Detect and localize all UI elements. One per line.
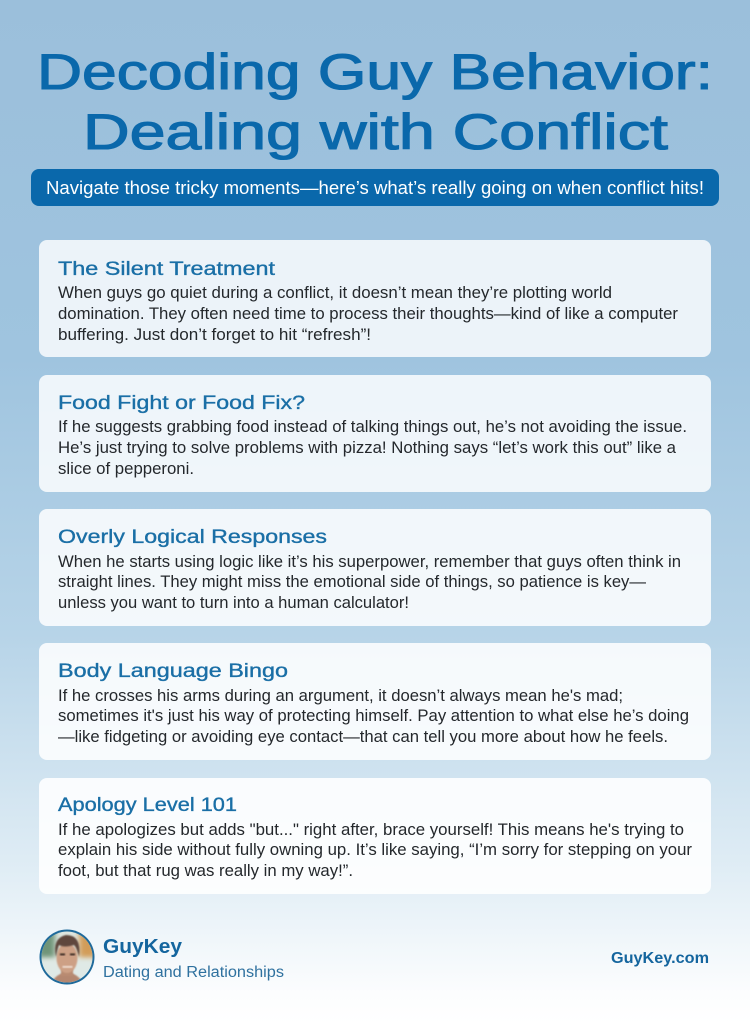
panel: The Silent Treatment [39,240,711,357]
icon: author avatar [38,930,96,986]
panel: Overly Logical Responses: When he starts using logic like it’s his superpower, remember that guys often think in [58,553,681,571]
panel: Body Language Bingo [39,643,711,760]
panel: Apology Level 101: Apology Level 101 [58,795,237,816]
subtitle banner [31,169,719,206]
panel: Body Language Bingo: sometimes it's just his way of protecting himself. Pay attention to what else he’s doing [58,707,689,725]
panel: Overly Logical Responses: unless you want to turn into a human calculator! [58,594,409,612]
panel: Apology Level 101: foot, but that rug was really in my way!”. [58,862,353,880]
panel: The Silent Treatment: buffering. Just don’t forget to hit “refresh”! [58,326,371,344]
panel: Overly Logical Responses: straight lines. They might miss the emotional side of things, so patience is key— [58,573,647,591]
panel: The Silent Treatment: When guys go quiet during a conflict, it doesn’t mean they’re plotting world [58,284,612,302]
panel: Apology Level 101: explain his side without fully owning up. It’s like saying, “I’m sorry for stepping on your [58,841,693,859]
panel: Apology Level 101: If he apologizes but adds "but..." right after, brace yourself! This means he's trying to [58,821,684,839]
panel: Body Language Bingo: If he crosses his arms during an argument, it doesn’t always mean he's mad; [58,687,623,705]
title: Dealing with Conflict [83,104,668,160]
panel: Body Language Bingo: Body Language Bingo [58,661,288,682]
panel: Food Fight or Food Fix?: If he suggests grabbing food instead of talking things out, he’s not avoiding the issue. [58,418,687,436]
panel: Apology Level 101 [39,778,711,894]
title: Decoding Guy Behavior: [37,44,713,100]
panel: Body Language Bingo: —like fidgeting or avoiding eye contact—that can tell you more about how he feels. [58,728,668,746]
panel: Food Fight or Food Fix?: Food Fight or Food Fix? [58,393,305,414]
panel: Food Fight or Food Fix? [39,375,711,492]
title [37,44,713,160]
panel: Overly Logical Responses [39,509,711,626]
footer brand name: GuyKey [103,935,183,958]
panel: Food Fight or Food Fix?: He’s just trying to solve problems with pizza! Nothing says “let’s work this out” like a [58,439,676,457]
panel: Food Fight or Food Fix?: slice of pepperoni. [58,460,194,478]
footer website: GuyKey.com [611,950,709,967]
panel: The Silent Treatment: domination. They often need time to process their thoughts—kind of like a computer [58,305,679,323]
subtitle banner: Navigate those tricky moments—here’s what’s really going on when conflict hits! [46,177,704,198]
panel: The Silent Treatment: The Silent Treatment [58,259,276,280]
footer tagline: Dating and Relationships [103,964,284,981]
panel: Overly Logical Responses: Overly Logical Responses [58,527,327,548]
